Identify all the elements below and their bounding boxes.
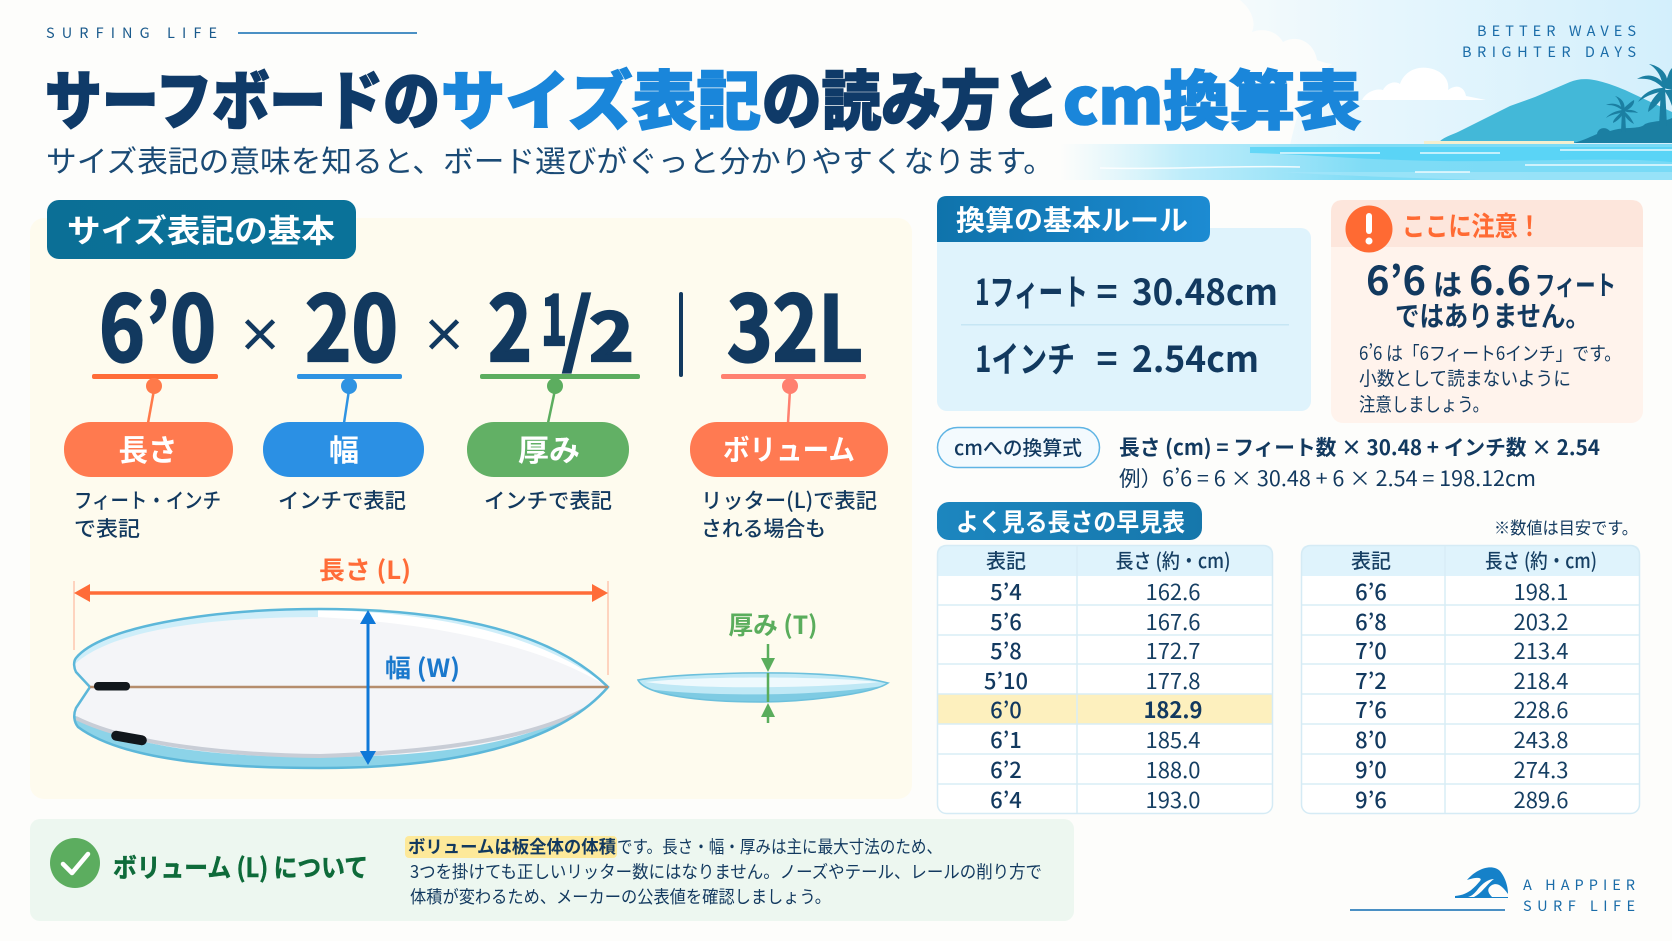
notation: 6'0 length: 6’0	[99, 257, 216, 387]
dark palm island	[1573, 118, 1672, 143]
table: lengths right: 289.6	[1514, 783, 1568, 815]
subtitle: サイズ表記の意味を知ると、ボード選びがぐっと分かりやすくなります。	[46, 137, 1054, 181]
explanation text: 3つを掛けても正しいリッター数にはなりません。ノーズやテール、レールの削り方で	[410, 859, 1042, 884]
callout: length: フィート・インチ	[74, 485, 221, 515]
rule: one foot: =	[1096, 264, 1118, 316]
rule: one foot	[975, 264, 1278, 316]
callout: thickness: インチで表記	[484, 485, 612, 515]
logo: a happier surf life: SURF LIFE	[1523, 895, 1635, 916]
heading: conversion rules: 換算の基本ルール	[956, 199, 1188, 239]
conversion formula: 長さ (cm) = フィート数 × 30.48 + インチ数 × 2.54	[1119, 432, 1600, 462]
table: lengths right: 274.3	[1514, 753, 1568, 785]
heading: size notation basics: サイズ表記の基本	[67, 206, 335, 252]
title: cm換算表	[1063, 51, 1361, 143]
notation: 2 1/2 thickness	[488, 257, 634, 387]
sea colour bands and foam	[1100, 147, 1672, 180]
table: lengths right: 7’6	[1355, 693, 1387, 725]
table: lengths left	[937, 545, 1273, 815]
arrow: board thickness	[728, 606, 818, 723]
table: lengths right: 228.6	[1514, 693, 1568, 725]
badge: cm conversion formula: cmへの換算式	[954, 432, 1082, 461]
tagline: better waves brighter days: BRIGHTER DAYS	[1462, 41, 1636, 62]
notation: 2 1/2 thickness: /	[562, 266, 592, 382]
panel: about volume	[30, 819, 1074, 921]
callout: length: で表記	[74, 513, 140, 543]
caution statement: 6.6	[1469, 249, 1531, 307]
callout: volume: される場合も	[701, 513, 826, 543]
mountain island	[1439, 79, 1672, 143]
table: lengths left: 177.8	[1146, 664, 1200, 696]
notation: 32L volume: 32L	[727, 257, 863, 387]
callout: width: インチで表記	[278, 485, 406, 515]
tagline: better waves brighter days: BETTER WAVES	[1477, 20, 1636, 41]
notation: 2 1/2 thickness: 1	[541, 266, 567, 365]
table: lengths left: 5’6	[990, 605, 1022, 637]
icon: exclamation	[1346, 206, 1392, 252]
table: lengths right: 243.8	[1514, 723, 1568, 755]
cloud: small cloud	[1362, 68, 1486, 100]
rule: one foot: 30.48cm	[1132, 264, 1278, 316]
table: lengths right	[1301, 545, 1640, 815]
heading: about volume: ボリューム (L) について	[113, 848, 368, 885]
panel: caution	[1331, 200, 1643, 423]
panel: size notation basics	[30, 200, 912, 799]
table: lengths left: 6’4	[990, 783, 1022, 815]
callout: volume: リッター(L)で表記	[701, 485, 877, 515]
table: lengths right: 213.4	[1514, 634, 1568, 666]
heading: quick reference table: よく見る長さの早見表	[956, 503, 1185, 539]
separator bar	[679, 292, 683, 377]
surfboard side view	[638, 673, 888, 705]
title: サーフボードの	[45, 51, 440, 143]
table: lengths left: 193.0	[1146, 783, 1200, 815]
callout: thickness: 厚み	[518, 426, 580, 470]
table: lengths right: 6’8	[1355, 605, 1387, 637]
table: lengths right: 9’6	[1355, 783, 1387, 815]
table: lengths left: 表記	[986, 545, 1026, 574]
arrow: board length: 長さ (L)	[319, 551, 411, 587]
caution explanation: 小数として読まないように	[1359, 364, 1571, 391]
notation: 2 1/2 thickness: 2	[589, 285, 634, 381]
callout: width	[263, 374, 424, 515]
table: lengths left: 185.4	[1146, 723, 1200, 755]
table: lengths left: 5’8	[990, 634, 1022, 666]
table: lengths right: 7’2	[1355, 664, 1387, 696]
callout: length: 長さ	[118, 426, 178, 470]
table: lengths right: 8’0	[1355, 723, 1387, 755]
table: lengths right: 6’6	[1355, 575, 1387, 607]
caution explanation	[1359, 339, 1621, 417]
explanation text: 体積が変わるため、メーカーの公表値を確認しましょう。	[410, 884, 831, 909]
table: lengths right: 198.1	[1514, 575, 1568, 607]
rule: one foot: 1フィート	[975, 264, 1088, 316]
table: lengths left: 5’10	[984, 664, 1028, 696]
callout: volume	[690, 374, 888, 543]
caution statement: ではありません。	[1395, 295, 1590, 335]
cloud: large white cloud	[1100, 0, 1332, 145]
callout: thickness	[467, 374, 640, 515]
panel: conversion rules	[937, 196, 1311, 411]
table: lengths right: 長さ (約・cm)	[1485, 545, 1597, 574]
arrow: board thickness: 厚み (T)	[728, 606, 818, 642]
icon: fin	[110, 730, 148, 746]
icon: wave	[1455, 867, 1508, 898]
callout: length	[64, 374, 233, 543]
rule: one inch	[975, 331, 1259, 383]
table: lengths left: 6’0	[990, 693, 1022, 725]
notation: 20 width: 20	[305, 257, 398, 387]
table: lengths left: 167.6	[1146, 605, 1200, 637]
table: lengths left: 188.0	[1146, 753, 1200, 785]
icon: check mark	[50, 838, 100, 888]
conversion formula	[1119, 432, 1600, 493]
heading: size notation basics	[47, 200, 356, 259]
rule: one inch: 1インチ	[975, 331, 1075, 383]
brand label: SURFING LIFE: SURFING LIFE	[46, 22, 217, 43]
badge: cm conversion formula	[938, 428, 1100, 468]
icon: fin	[94, 682, 130, 690]
arrow: board length	[74, 551, 608, 675]
title: の読み方と	[762, 51, 1060, 143]
explanation text: ボリュームは板全体の体積	[408, 834, 616, 859]
tagline: better waves brighter days	[1462, 20, 1636, 62]
sea strip	[1060, 144, 1672, 180]
conversion formula: 例）6’6 = 6 × 30.48 + 6 × 2.54 = 198.12cm	[1119, 463, 1536, 493]
table: lengths right: 表記	[1351, 545, 1391, 574]
caution statement	[1366, 249, 1616, 335]
rule: one inch: 2.54cm	[1132, 331, 1259, 383]
highlight	[405, 836, 617, 858]
table: lengths right: 203.2	[1514, 605, 1568, 637]
table: lengths left: 172.7	[1146, 634, 1200, 666]
table: lengths left: 長さ (約・cm)	[1116, 545, 1230, 574]
arrow: board width	[360, 610, 460, 765]
table: lengths right: 7’0	[1355, 634, 1387, 666]
explanation text: です。長さ・幅・厚みは主に最大寸法のため、	[617, 834, 942, 859]
arrow: board width: 幅 (W)	[385, 649, 460, 685]
table: lengths left: 5’4	[990, 575, 1022, 607]
heading: caution: ここに注意！	[1402, 205, 1541, 244]
callout: volume: ボリューム	[723, 427, 855, 469]
multiply sign: ×	[237, 300, 283, 366]
stringer	[90, 686, 608, 688]
notation: 2 1/2 thickness: 2	[488, 257, 532, 387]
table: lengths left: 182.9	[1143, 693, 1203, 725]
header scenery: sky, clouds, sea and island	[1060, 0, 1672, 180]
table: lengths left: 6’2	[990, 753, 1022, 785]
callout: width: 幅	[329, 426, 359, 470]
icon: small palm tree	[1606, 96, 1638, 132]
table: lengths right: 9’0	[1355, 753, 1387, 785]
sand strip	[1424, 141, 1574, 144]
table: lengths left: 162.6	[1146, 575, 1200, 607]
table: lengths left: 6’1	[990, 723, 1022, 755]
caution explanation: 6’6 は「6フィート6インチ」です。	[1359, 339, 1621, 366]
logo: a happier surf life	[1350, 867, 1635, 916]
caution explanation: 注意しましょう。	[1359, 390, 1489, 417]
caution statement: フィート	[1535, 264, 1616, 303]
icon: large palm tree	[1637, 64, 1672, 126]
caution statement: 6’6	[1366, 249, 1426, 307]
logo: a happier surf life: A HAPPIER	[1523, 874, 1635, 895]
table: lengths right: 218.4	[1514, 664, 1568, 696]
multiply sign: ×	[421, 300, 467, 366]
caution statement: は	[1433, 262, 1462, 304]
rule: one inch: =	[1096, 331, 1118, 383]
title: サイズ表記	[441, 51, 761, 143]
note: values approximate: ※数値は目安です。	[1494, 514, 1638, 539]
title	[45, 51, 1361, 143]
surfboard top view	[74, 600, 608, 775]
explanation text	[408, 834, 1042, 909]
